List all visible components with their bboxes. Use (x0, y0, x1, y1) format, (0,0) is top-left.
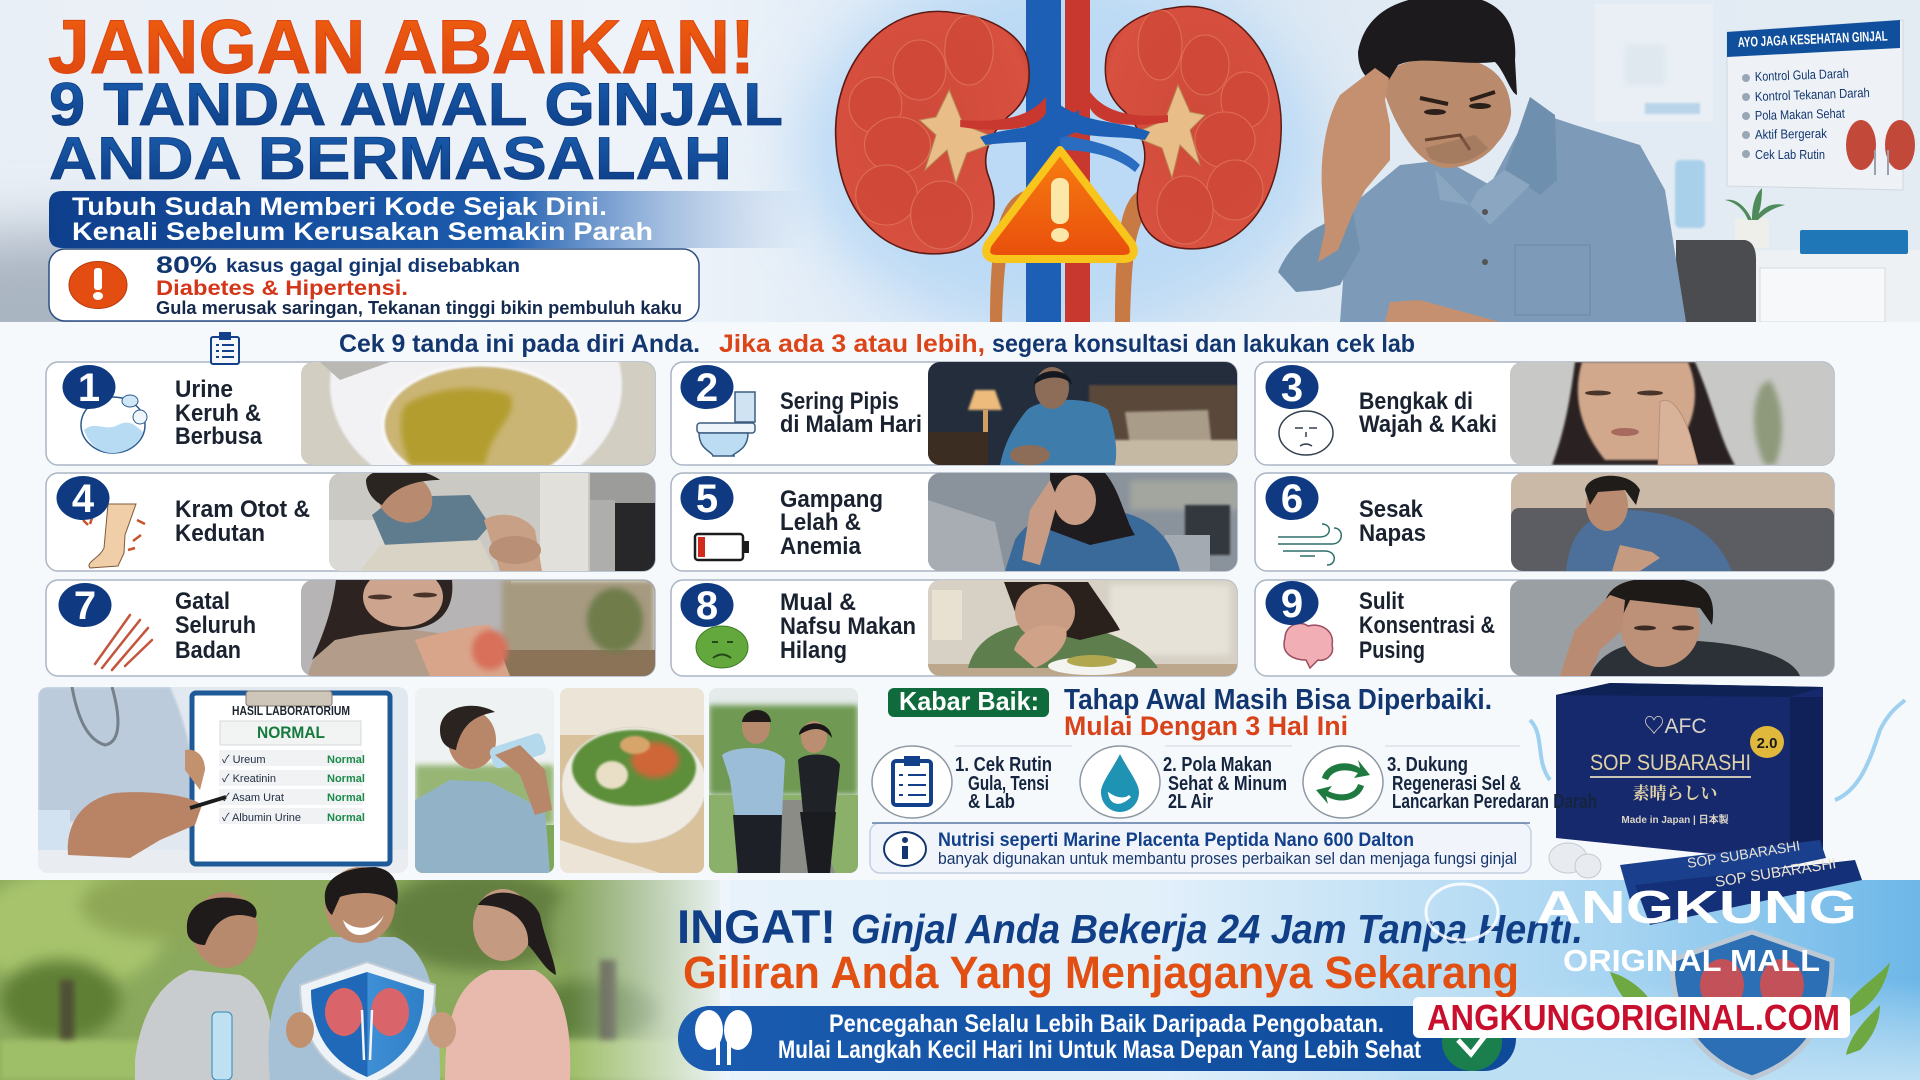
label: sulit konsentrasi: Sulit (1359, 588, 1404, 615)
poster: ayo jaga kesehatan ginjal (1727, 20, 1915, 190)
step 1: checkups: Gula, Tensi (968, 773, 1049, 795)
panel: card 9 concentration (1255, 578, 1834, 676)
label: mual: Mual & (780, 589, 856, 616)
label: gampang lelah: Anemia (780, 533, 862, 560)
photo: toilet bowl foam (301, 362, 655, 465)
badge: 4 (56, 476, 110, 521)
icon: clipboard (211, 333, 239, 364)
panel: card 4 cramps (46, 464, 655, 571)
label: gatal: Seluruh (175, 612, 256, 639)
label: kram otot: Kram Otot & (175, 496, 310, 523)
badge: 2 (680, 365, 734, 410)
label: mual: Hilang (780, 637, 847, 664)
label: sulit konsentrasi: Konsentrasi & (1359, 612, 1495, 639)
step 2: diet and water (1080, 746, 1287, 818)
icon: swollen face (1279, 411, 1333, 455)
callout: 80 percent: kasus gagal ginjal disebabkan (226, 256, 520, 277)
badge: 7 (58, 583, 112, 628)
heading: ingat: Giliran Anda Yang Menjaganya Sekarang (683, 947, 1519, 998)
callout: 80 percent: 80% (156, 252, 217, 279)
info box: marine placenta: banyak digunakan untuk membantu proses perbaikan sel dan menjaga fungsi ginjal (938, 849, 1517, 868)
photo: man drinking water (415, 688, 554, 873)
panel: card 1 urine (45, 361, 656, 466)
sachets: SOP SUBARASHI (1714, 855, 1837, 891)
icon: warning triangle (986, 150, 1134, 259)
panel: card 2 night urination (671, 362, 1240, 468)
clipboard: hasil laboratorium (192, 691, 390, 864)
label: gampang lelah: Gampang (780, 486, 883, 513)
photo: doctor with lab results (38, 687, 408, 873)
panel: card 6 shortness of breath (1255, 473, 1834, 571)
pearls (1549, 843, 1601, 878)
right kidney (1060, 6, 1281, 249)
step 3: cell regeneration: Regenerasi Sel & (1392, 773, 1521, 795)
badge: 2.0 (1750, 726, 1784, 758)
step 2: diet and water: Sehat & Minum (1168, 773, 1287, 795)
step 1: checkups: 1. Cek Rutin (955, 754, 1052, 776)
clipboard: hasil laboratorium: ✓ Ureum (222, 754, 266, 766)
clipboard: hasil laboratorium: NORMAL (257, 723, 325, 742)
photo: woman scratching arm (301, 580, 655, 676)
badge: 5: 5 (696, 477, 718, 521)
badge: 7: 7 (74, 584, 96, 628)
clipboard: hasil laboratorium: ✓ Albumin Urine (222, 812, 301, 824)
clipboard: hasil laboratorium: Normal (327, 773, 365, 785)
title: jangan abaikan: JANGAN ABAIKAN! (48, 5, 755, 90)
photo: man with headache (1510, 578, 1834, 676)
clipboard: hasil laboratorium: Normal (327, 754, 365, 766)
clipboard: hasil laboratorium: ✓ Kreatinin (222, 773, 276, 785)
step 3: cell regeneration (1303, 746, 1597, 818)
photo: man on bed at night (928, 362, 1240, 468)
photo: man with leg cramp (329, 464, 655, 571)
product shield with leaves (1610, 932, 1890, 1078)
label: bengkak: Wajah & Kaki (1359, 411, 1497, 438)
product: sop subarashi box: 素晴らしい (1632, 779, 1718, 804)
poster: ayo jaga kesehatan ginjal: Kontrol Gula Darah (1755, 66, 1849, 84)
callout: 80 percent: Diabetes & Hipertensi. (156, 277, 408, 300)
info box: marine placenta: Nutrisi seperti Marine Placenta Peptida Nano 600 Dalton (938, 830, 1414, 851)
step 3: cell regeneration: 3. Dukung (1387, 754, 1468, 776)
panel: card 8 nausea (671, 580, 1237, 676)
heading: checklist instruction (339, 330, 1415, 358)
panel: card 7 itching (45, 579, 656, 677)
sachets: SOP SUBARASHI (1686, 837, 1801, 871)
heading: checklist instruction: Jika ada 3 atau lebih, (719, 330, 985, 358)
watermark: angkung original mall: ORIGINAL MALL (1563, 943, 1820, 978)
poster: ayo jaga kesehatan ginjal: Pola Makan Sehat (1755, 106, 1845, 123)
icon: scratch marks (95, 615, 152, 670)
panel: bottom banner (0, 867, 1920, 1080)
clipboard: hasil laboratorium: Normal (327, 812, 365, 824)
hands holding pen (68, 750, 226, 858)
panel: card 5 fatigue (671, 473, 1240, 571)
info box: marine placenta (870, 823, 1531, 873)
icon: toilet (697, 392, 755, 456)
icon: alert circle (69, 262, 127, 308)
heading: ingat: INGAT! (677, 900, 836, 953)
product: sop subarashi box: ♡AFC (1644, 715, 1706, 738)
panel: good news: Mulai Dengan 3 Hal Ini (1064, 711, 1348, 741)
badge: 2.0: 2.0 (1757, 735, 1777, 752)
poster: ayo jaga kesehatan ginjal: Cek Lab Rutin (1755, 147, 1825, 162)
call to action pill: Pencegahan Selalu Lebih Baik Daripada Pengobatan. (829, 1010, 1384, 1038)
watermark: angkung original mall: ANGKUNG (1536, 881, 1857, 933)
label: sering pipis: di Malam Hari (780, 411, 922, 438)
product: sop subarashi box (1530, 683, 1905, 925)
badge: 3 (1266, 365, 1318, 410)
product: sop subarashi box: SOP SUBARASHI (1590, 750, 1751, 775)
icon: wind (1278, 524, 1341, 565)
icon: leg cramp (83, 504, 145, 568)
callout: 80 percent (49, 249, 699, 321)
step 3: cell regeneration: Lancarkan Peredaran Darah (1392, 791, 1597, 813)
label: urine keruh: Urine (175, 376, 233, 403)
badge: 9: 9 (1281, 582, 1303, 626)
badge: 4: 4 (72, 477, 95, 521)
panel: header (0, 0, 1920, 322)
label: bengkak: Bengkak di (1359, 388, 1473, 415)
product: sop subarashi box: Made in Japan | 日本製 (1621, 813, 1729, 826)
panel: good news (870, 684, 1597, 873)
title: jangan abaikan: 9 TANDA AWAL GINJAL (49, 71, 783, 138)
sachets (1620, 837, 1862, 925)
heading: ingat (677, 900, 1583, 998)
badge: 8: 8 (696, 584, 718, 628)
clipboard: hasil laboratorium: Normal (327, 792, 365, 804)
callout: 80 percent: Gula merusak saringan, Tekanan tinggi bikin pembuluh kaku (156, 298, 682, 318)
label: urine keruh: Keruh & (175, 400, 261, 427)
title: jangan abaikan: ANDA BERMASALAH (49, 125, 732, 192)
badge: 5 (680, 476, 734, 521)
step 1: checkups: & Lab (968, 791, 1015, 813)
badge: 3: 3 (1281, 366, 1303, 410)
step 2: diet and water: 2L Air (1168, 791, 1213, 813)
clinic background (1595, 4, 1920, 322)
call to action pill: Mulai Langkah Kecil Hari Ini Untuk Masa Depan Yang Lebih Sehat (778, 1036, 1422, 1064)
icon: white kidneys (695, 1010, 752, 1065)
illustration: worried man (1278, 0, 1686, 322)
badge: 9 (1266, 581, 1318, 626)
watermark: angkung original mall (1426, 881, 1857, 978)
poster: ayo jaga kesehatan ginjal: Kontrol Tekanan Darah (1755, 85, 1870, 104)
subtitle band: Kenali Sebelum Kerusakan Semakin Parah (72, 218, 653, 246)
label: gatal: Gatal (175, 588, 230, 615)
badge: 1: 1 (78, 366, 100, 410)
subtitle band: Tubuh Sudah Memberi Kode Sejak Dini. (72, 193, 607, 221)
badge: 1 (62, 365, 116, 410)
label: sesak napas: Sesak (1359, 496, 1424, 523)
photo: family with shield (135, 867, 570, 1080)
label: sering pipis: Sering Pipis (780, 388, 899, 415)
step 1: checkups (872, 746, 1052, 818)
photo: man short of breath (1511, 473, 1834, 571)
panel: card 3 swelling (1255, 362, 1834, 465)
label: gampang lelah: Lelah & (780, 509, 861, 536)
photo: tired woman at laptop (928, 473, 1240, 571)
badge: kabar baik: Kabar Baik: (899, 686, 1039, 716)
photo: salad bowl (560, 688, 706, 873)
badge: 2: 2 (696, 366, 718, 410)
photo: nauseous woman with plate (928, 580, 1237, 676)
title: jangan abaikan (48, 19, 782, 180)
step 2: diet and water: 2. Pola Makan (1163, 754, 1272, 776)
photo: woman swollen face (1510, 362, 1834, 465)
photo: couple jogging (709, 688, 858, 873)
label: urine keruh: Berbusa (175, 423, 263, 450)
photo: park background (0, 870, 730, 1080)
heading: checklist instruction: Cek 9 tanda ini pada diri Anda. (339, 330, 700, 358)
left kidney (836, 11, 1079, 254)
icon: low battery (695, 534, 749, 560)
panel: good news: Tahap Awal Masih Bisa Diperbaiki. (1064, 684, 1492, 716)
clipboard: hasil laboratorium: HASIL LABORATORIUM (232, 703, 350, 718)
icon: sick face (696, 626, 748, 668)
subtitle band (49, 191, 810, 248)
badge: 6: 6 (1281, 477, 1303, 521)
icon: kidney shield (300, 962, 435, 1080)
icon: green check (1442, 1013, 1502, 1071)
heading: ingat: Ginjal Anda Bekerja 24 Jam Tanpa Henti. (851, 906, 1583, 952)
label: gatal: Badan (175, 637, 241, 664)
icon: bubbles (81, 395, 147, 453)
badge: 6 (1266, 476, 1318, 521)
badge: 8 (680, 583, 734, 628)
heading: checklist instruction: segera konsultasi dan lakukan cek lab (992, 330, 1415, 358)
watermark: angkungoriginal.com: ANGKUNGORIGINAL.COM (1427, 997, 1840, 1038)
poster: ayo jaga kesehatan ginjal: Aktif Bergerak (1755, 126, 1827, 142)
label: mual: Nafsu Makan (780, 613, 916, 640)
icon: brain (1284, 623, 1333, 668)
illustration: kidneys with warning (800, 0, 1320, 330)
call to action pill (678, 1006, 1516, 1071)
label: kram otot: Kedutan (175, 520, 265, 547)
label: sulit konsentrasi: Pusing (1359, 637, 1425, 664)
label: sesak napas: Napas (1359, 520, 1426, 547)
clipboard: hasil laboratorium: ✓ Asam Urat (222, 792, 284, 804)
water splash (1530, 700, 1905, 800)
